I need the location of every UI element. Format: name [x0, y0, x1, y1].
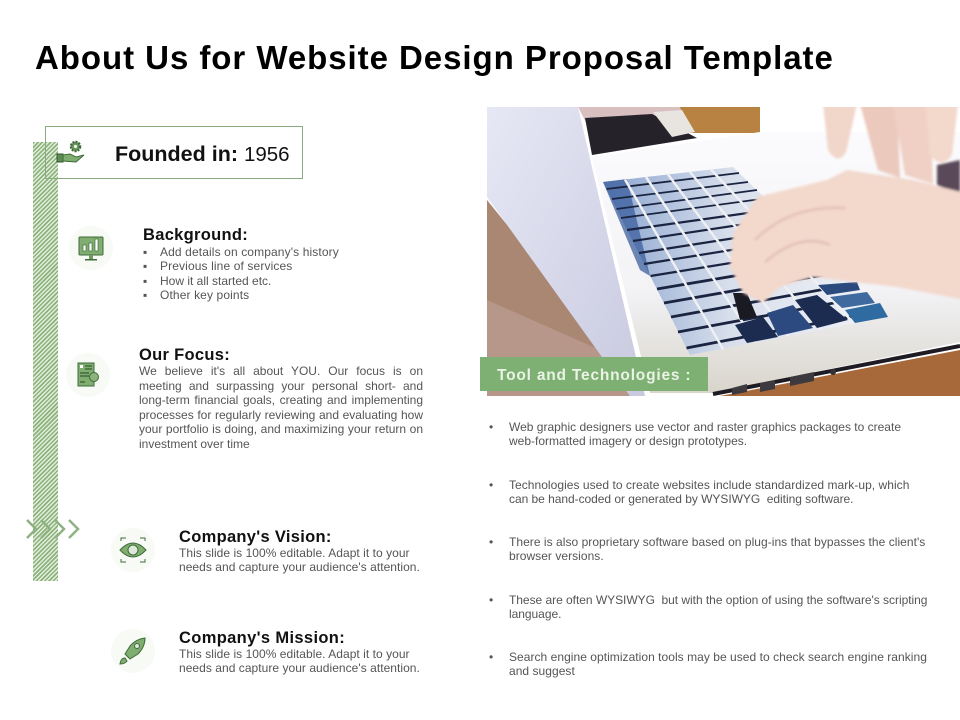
icon: vision eye	[111, 528, 155, 572]
icon: focus document	[66, 353, 110, 397]
vision text: needs and capture your audience's attention.	[179, 560, 420, 574]
background list: ▪	[143, 274, 147, 288]
our focus text: meeting and surpassing your personal short- and	[139, 378, 423, 392]
background list: Add details on company's history	[160, 245, 339, 259]
label: tool and technologies	[480, 357, 708, 391]
background list: How it all started etc.	[160, 274, 271, 288]
background list: ▪	[143, 245, 147, 259]
bullet 3	[489, 535, 925, 563]
bullet 4: •	[489, 592, 493, 606]
photo: hands typing on laptop	[487, 107, 960, 396]
background list: Other key points	[160, 288, 249, 302]
background list: ▪	[143, 259, 147, 273]
chevron arrows	[26, 519, 80, 539]
bullet 3: •	[489, 535, 493, 549]
label text: Tool and Technologies :	[497, 367, 691, 384]
bullet 4: These are often WYSIWYG but with the option of using the software's scripting	[509, 592, 927, 606]
bullet 4: language.	[509, 606, 561, 620]
panel: founded in	[45, 126, 303, 179]
mission heading: Company's Mission:	[179, 629, 345, 647]
our focus text: investment over time	[139, 436, 250, 450]
bullet 5: •	[489, 650, 493, 664]
panel: technology bullets	[489, 420, 927, 678]
bullet 5	[489, 650, 927, 678]
vision heading: Company's Vision:	[179, 528, 332, 546]
bullet 4	[489, 592, 927, 620]
background list	[143, 245, 339, 302]
icon: background monitor chart	[69, 226, 113, 270]
mission text	[179, 647, 420, 675]
our focus text: long-term financial goals, creating and implementing	[139, 393, 423, 407]
bullet 2: Technologies used to create websites include standardized mark-up, which	[509, 478, 909, 492]
bullet 1: Web graphic designers use vector and raster graphics packages to create	[509, 420, 901, 434]
icon: hand with gear	[56, 140, 84, 162]
bullet 3: browser versions.	[509, 549, 604, 563]
bullet 1: web-formatted imagery or design prototypes.	[509, 434, 747, 448]
our focus heading: Our Focus:	[139, 346, 230, 364]
background list: ▪	[143, 288, 147, 302]
bullet 3: There is also proprietary software based on plug-ins that bypasses the client's	[509, 535, 925, 549]
vision text: This slide is 100% editable. Adapt it to your	[179, 546, 410, 560]
mission text: needs and capture your audience's attention.	[179, 661, 420, 675]
mission text: This slide is 100% editable. Adapt it to your	[179, 647, 410, 661]
founded in text: Founded in: 1956	[115, 142, 290, 166]
bullet 2: can be hand-coded or generated by WYSIWYG editing software.	[509, 492, 853, 506]
bullet 1	[489, 420, 901, 448]
vision text	[179, 546, 420, 574]
bullet 5: and suggest	[509, 664, 575, 678]
icon: mission rocket	[111, 629, 155, 673]
background heading: Background:	[143, 226, 248, 244]
our focus text: We believe it's all about YOU. Our focus is on	[139, 364, 423, 378]
bullet 5: Search engine optimization tools may be used to check search engine ranking	[509, 650, 927, 664]
our focus text	[139, 364, 423, 450]
background list: Previous line of services	[160, 259, 292, 273]
our focus text: your portfolio is doing, and maximizing your return on	[139, 422, 423, 436]
title: About Us for Website Design Proposal Template	[35, 39, 834, 76]
bullet 2: •	[489, 478, 493, 492]
bullet 1: •	[489, 420, 493, 434]
bullet 2	[489, 478, 909, 506]
our focus text: processes for regularly reviewing and evaluating how	[139, 408, 423, 422]
striped vertical bar	[33, 142, 58, 581]
